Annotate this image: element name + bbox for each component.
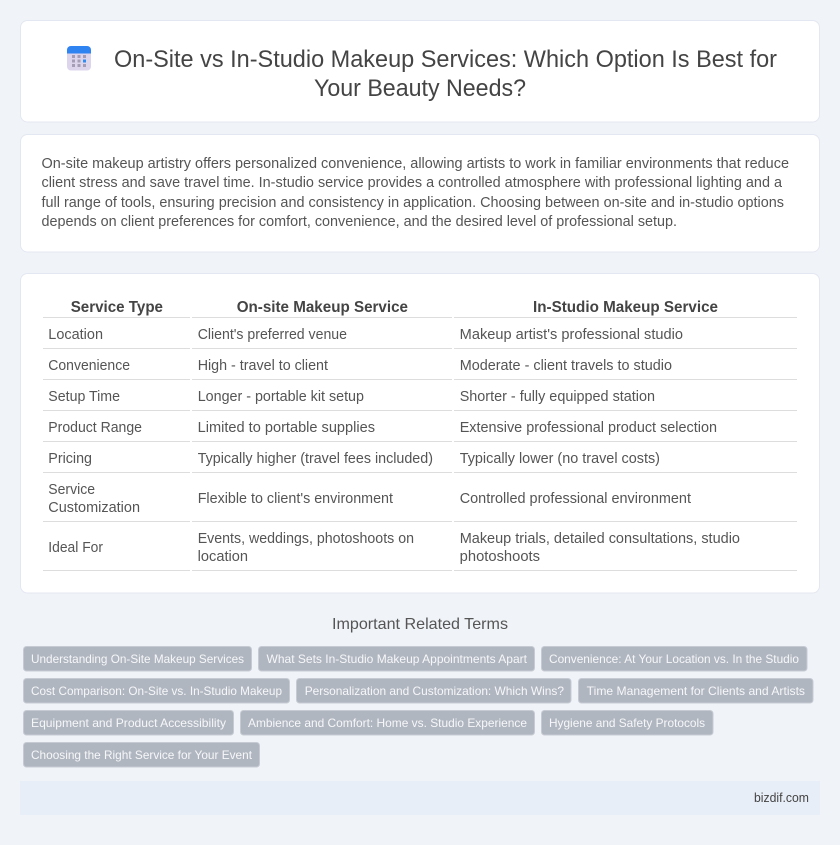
table header row [43,299,797,318]
heading: important related terms: Important Related Terms [332,616,508,633]
footer [20,781,820,815]
row: convenience [43,358,797,380]
row: ideal for: Makeup trials, detailed consultations, studio [460,531,740,547]
row: setup time: Shorter - fully equipped station [460,389,655,405]
row: product range: Limited to portable supplies [198,420,375,436]
row: pricing [43,451,797,472]
panel: comparison table [20,274,820,593]
row: service customization: Service [48,482,95,498]
row: ideal for: Events, weddings, photoshoots on [198,531,414,547]
title [114,46,777,102]
row: location: Location [48,327,103,343]
title: Your Beauty Needs? [314,75,526,102]
row: product range [43,420,797,442]
text block: introduction paragraph [42,156,789,230]
text block: introduction paragraph: On-site makeup artistry offers personalized convenience, allowing artists to work in familiar environments that reduce [42,156,789,172]
row: location: Client's preferred venue [198,327,347,343]
row: service customization: Controlled professional environment [460,491,691,507]
row: service customization: Flexible to client's environment [198,491,393,507]
row: ideal for [43,531,797,570]
footer: bizdif.com [754,791,809,805]
tag: equipment: Equipment and Product Accessibility [31,716,226,730]
row: convenience: Moderate - client travels to studio [460,358,672,374]
row: ideal for: location [198,549,248,565]
row: convenience: Convenience [48,358,130,374]
table header row: Service Type [71,299,163,316]
row: pricing: Typically lower (no travel costs) [460,451,660,467]
text block: introduction paragraph: client stress and save travel time. In-studio service provides a controlled atmosphere with professional lighting and a [42,175,783,191]
tag: time management: Time Management for Clients and Artists [587,684,805,698]
tag: hygiene [542,710,713,735]
tag: ambience [240,710,534,735]
tag: personalization: Personalization and Customization: Which Wins? [305,684,564,698]
row: convenience: High - travel to client [198,358,328,374]
row: pricing: Pricing [48,451,92,467]
tag: what sets in-studio apart [258,646,534,671]
tag: understanding on-site [24,646,252,671]
table header row: In-Studio Makeup Service [533,299,718,316]
title: On-Site vs In-Studio Makeup Services: Which Option Is Best for [114,46,777,73]
row: location: Makeup artist's professional studio [460,327,683,343]
tag: choosing the right service [24,742,260,767]
row: service customization [43,482,797,522]
row: service customization: Customization [48,500,140,516]
tag: time management [578,678,813,703]
icon: calendar [67,46,91,70]
text block: introduction paragraph: full range of tools, ensuring precision and consistency in application. Choosing between on-site and in-studio options [42,195,784,211]
tag: choosing the right service: Choosing the Right Service for Your Event [31,748,253,762]
table header row: On-site Makeup Service [237,299,408,316]
tag: cost comparison [24,678,290,703]
row: setup time: Longer - portable kit setup [198,389,364,405]
panel: related term tags [24,646,813,767]
tag: hygiene: Hygiene and Safety Protocols [549,716,705,730]
tag: ambience: Ambience and Comfort: Home vs. Studio Experience [248,716,527,730]
tag: personalization [296,678,571,703]
tag: cost comparison: Cost Comparison: On-Site vs. In-Studio Makeup [31,684,282,698]
row: ideal for: photoshoots [460,549,540,565]
tag: what sets in-studio apart: What Sets In-Studio Makeup Appointments Apart [266,652,528,666]
tag: convenience [542,646,807,671]
row: product range: Product Range [48,420,142,436]
tag: convenience: Convenience: At Your Location vs. In the Studio [549,652,799,666]
tag: understanding on-site: Understanding On-Site Makeup Services [31,652,244,666]
tag: equipment [24,710,234,735]
text block: introduction paragraph: depends on client preferences for comfort, convenience, and the desired level of professional setup. [42,214,677,230]
panel: title header [20,20,820,122]
row: product range: Extensive professional product selection [460,420,717,436]
row: setup time: Setup Time [48,389,120,405]
panel: introduction [20,134,820,252]
row: setup time [43,389,797,410]
row: location [43,327,797,348]
row: pricing: Typically higher (travel fees included) [198,451,433,467]
row: ideal for: Ideal For [48,540,103,556]
